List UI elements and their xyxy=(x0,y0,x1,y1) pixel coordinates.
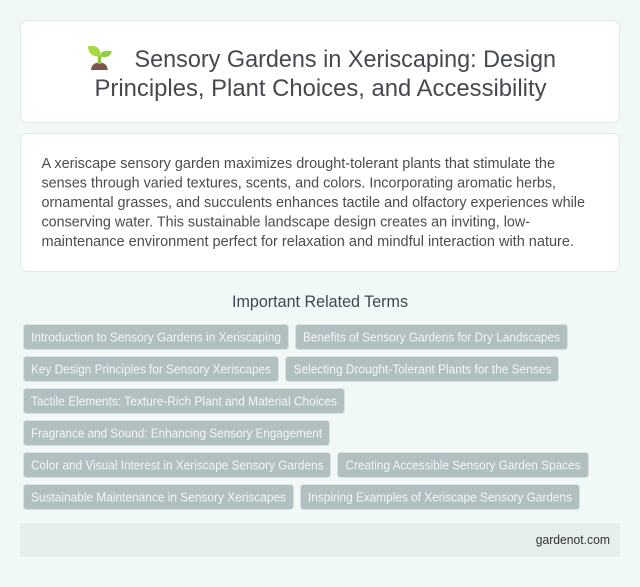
chip: fragrance and sound xyxy=(24,420,330,446)
chip: introduction xyxy=(24,324,288,350)
chip: selecting plants xyxy=(286,356,558,382)
chip: sustainable maintenance xyxy=(24,484,294,510)
description text: conserving water. This sustainable landscape design creates an inviting, low- xyxy=(42,214,530,230)
panel: description xyxy=(20,134,620,272)
chip: benefits xyxy=(296,324,568,350)
description text: ornamental grasses, and succulents enhances tactile and olfactory experiences while xyxy=(42,194,585,211)
chip: key design principles xyxy=(24,356,278,382)
heading: important related terms: Important Related Terms xyxy=(232,293,408,311)
chip: fragrance and sound: Fragrance and Sound: Enhancing Sensory Engagement xyxy=(31,426,322,440)
chip: introduction: Introduction to Sensory Gardens in Xeriscaping xyxy=(31,330,281,344)
icon: seedling xyxy=(88,46,112,70)
description text: A xeriscape sensory garden maximizes drought-tolerant plants that stimulate the xyxy=(42,155,555,172)
title card xyxy=(20,20,620,122)
chip: tactile elements xyxy=(24,388,344,414)
chip: inspiring examples: Inspiring Examples of Xeriscape Sensory Gardens xyxy=(308,490,572,504)
description text xyxy=(42,155,585,250)
chip: accessible spaces xyxy=(338,452,588,478)
chip: selecting plants: Selecting Drought-Tolerant Plants for the Senses xyxy=(294,362,552,376)
term chips xyxy=(24,324,588,510)
chip: inspiring examples xyxy=(300,484,580,510)
chip: color and visual interest xyxy=(24,452,330,478)
chip: tactile elements: Tactile Elements: Texture-Rich Plant and Material Choices xyxy=(31,394,337,408)
title text xyxy=(94,46,556,102)
chip: color and visual interest: Color and Visual Interest in Xeriscape Sensory Gardens xyxy=(31,458,324,472)
chip: key design principles: Key Design Principles for Sensory Xeriscapes xyxy=(31,362,271,376)
chip: accessible spaces: Creating Accessible Sensory Garden Spaces xyxy=(346,458,580,472)
chip: sustainable maintenance: Sustainable Maintenance in Sensory Xeriscapes xyxy=(31,490,286,504)
title text: Principles, Plant Choices, and Accessibility xyxy=(94,75,547,102)
title text: Sensory Gardens in Xeriscaping: Design xyxy=(134,46,556,73)
footer xyxy=(20,523,620,557)
footer source text: gardenot.com xyxy=(536,532,610,547)
chip: benefits: Benefits of Sensory Gardens for Dry Landscapes xyxy=(303,330,560,344)
description text: maintenance environment perfect for relaxation and mindful interaction with nature. xyxy=(42,233,574,250)
description text: senses through varied textures, scents, and colors. Incorporating aromatic herbs, xyxy=(42,174,556,192)
